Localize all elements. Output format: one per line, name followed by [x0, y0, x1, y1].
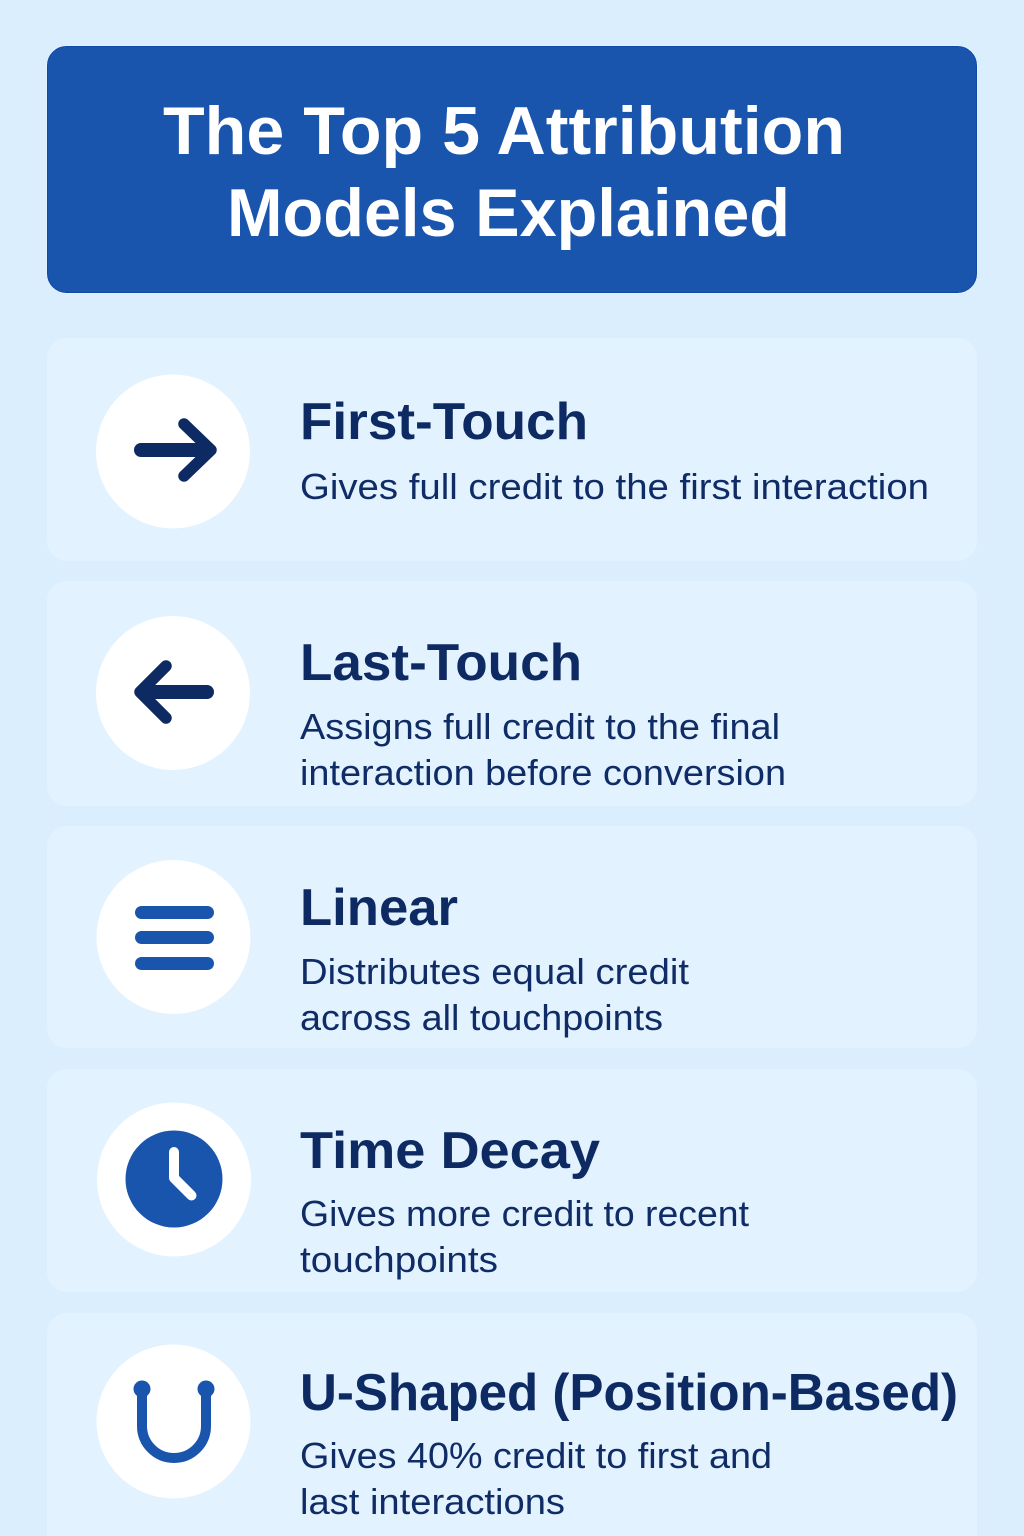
description: Distributes equal credit [300, 951, 689, 992]
panel: u-shaped [47, 1313, 977, 1536]
description: Gives full credit to the first interaction [300, 466, 929, 507]
description: Gives 40% credit to first and [300, 1435, 772, 1476]
icon: three equal bars [96, 860, 250, 1014]
description: across all touchpoints [300, 997, 663, 1038]
heading: U-Shaped (Position-Based) [300, 1364, 958, 1422]
heading: Linear [300, 879, 458, 937]
title [163, 93, 845, 251]
panel: linear [47, 826, 977, 1048]
description: Gives more credit to recent [300, 1193, 749, 1234]
description: last interactions [300, 1481, 565, 1522]
description: Assigns full credit to the final [300, 706, 780, 747]
description: touchpoints [300, 1239, 498, 1280]
heading: Last-Touch [300, 634, 582, 692]
title: Models Explained [227, 175, 790, 251]
icon: left arrow [96, 616, 250, 770]
description [300, 951, 689, 1038]
description [300, 1193, 749, 1280]
heading: Time Decay [300, 1122, 600, 1180]
panel: first-touch [47, 338, 977, 561]
title: The Top 5 Attribution [163, 93, 845, 169]
description [300, 706, 786, 793]
description [300, 1435, 772, 1522]
panel: last-touch [47, 581, 977, 806]
description: interaction before conversion [300, 752, 786, 793]
panel: time decay [47, 1069, 977, 1292]
title banner [46, 46, 978, 294]
icon: right arrow [96, 374, 250, 528]
icon: U shape [96, 1344, 250, 1498]
icon: clock [97, 1102, 251, 1256]
heading: First-Touch [300, 393, 588, 451]
